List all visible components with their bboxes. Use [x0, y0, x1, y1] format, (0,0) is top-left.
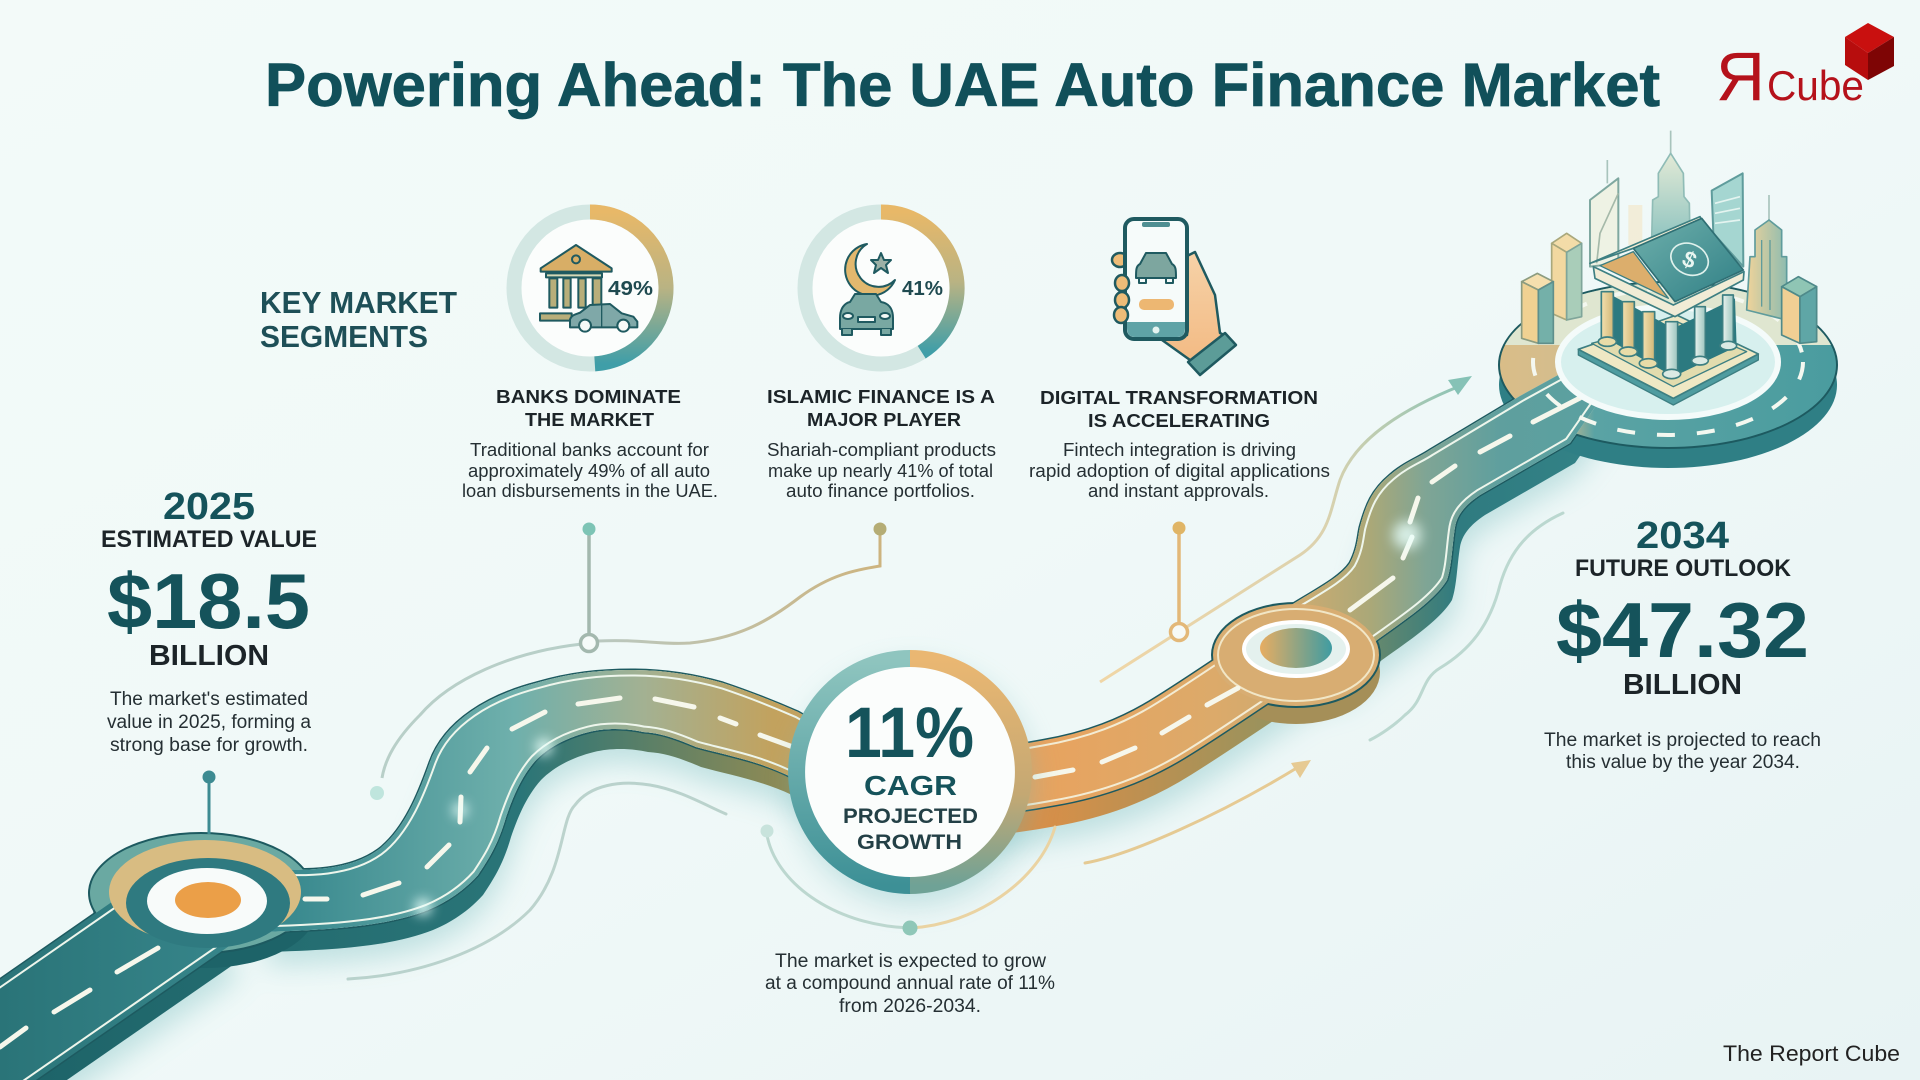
- logo: RCube: Cube: [1767, 62, 1864, 109]
- pin: 2025 marker: [202, 770, 216, 834]
- footer credit: The Report Cube: [1723, 1041, 1900, 1066]
- block: 2034 future outlook: this value by the year 2034.: [1566, 752, 1800, 773]
- segment text: digital transformation: [1029, 387, 1330, 501]
- illustration: city skyline and bank: [1522, 131, 1817, 405]
- text: CAGR description: [765, 951, 1055, 1017]
- destination plate: ring road and glow disc: [1533, 289, 1803, 435]
- block: 2025 estimated value: The market's estimated: [110, 689, 308, 710]
- block: 2025 estimated value: 2025: [163, 486, 255, 528]
- segment text: banks: loan disbursements in the UAE.: [462, 480, 718, 501]
- block: 2025 estimated value: BILLION: [149, 640, 269, 672]
- segment text: islamic finance: auto finance portfolios.: [786, 480, 975, 501]
- segment text: banks: THE MARKET: [525, 409, 655, 430]
- segment text: banks: BANKS DOMINATE: [496, 386, 681, 407]
- ring chart: banks 49%: 49%: [608, 278, 653, 300]
- block: 2025 estimated value: ESTIMATED VALUE: [101, 526, 317, 553]
- road: plates: [90, 283, 1836, 952]
- columns: [1598, 292, 1737, 379]
- block: 2025 estimated value: $18.5: [107, 557, 310, 645]
- dollar emblem: [1666, 237, 1714, 281]
- mid node: milestone: [1213, 604, 1379, 706]
- ring chart: islamic finance 41%: [805, 212, 957, 364]
- text: CAGR description: from 2026-2034.: [839, 996, 981, 1017]
- segment text: banks: Traditional banks account for: [470, 439, 709, 460]
- block: 2034 future outlook: BILLION: [1623, 669, 1742, 701]
- growth circle: 11% CAGR: [793, 658, 1033, 905]
- icon: car on phone: [1136, 253, 1176, 278]
- segment text: islamic finance: ISLAMIC FINANCE IS A: [767, 386, 995, 407]
- marker: orange dot: [175, 882, 241, 918]
- arc under growth circle: [760, 824, 1055, 936]
- heading: key market segments: SEGMENTS: [260, 319, 428, 354]
- text: CAGR description: at a compound annual rate of 11%: [765, 973, 1055, 994]
- segment text: banks: [462, 386, 718, 501]
- ring chart: banks 49%: [514, 212, 666, 364]
- heading: key market segments: [260, 285, 457, 354]
- segment text: islamic finance: Shariah-compliant products: [767, 439, 996, 460]
- block: 2034 future outlook: The market is projected to reach: [1544, 730, 1821, 751]
- growth circle: 11% CAGR: GROWTH: [857, 830, 962, 854]
- dollar emblem: $: [1678, 245, 1701, 274]
- ring chart: islamic finance 41%: 41%: [902, 278, 943, 300]
- block: 2034 future outlook: [1544, 515, 1821, 773]
- segment text: digital transformation: IS ACCELERATING: [1088, 410, 1270, 431]
- road: surface: [0, 352, 1600, 1063]
- segment text: digital transformation: and instant approvals.: [1088, 480, 1269, 501]
- block: 2034 future outlook: FUTURE OUTLOOK: [1575, 555, 1792, 582]
- road: shadow: [0, 386, 1606, 1080]
- logo: RCube: Я: [1716, 38, 1765, 115]
- segment text: digital transformation: Fintech integration is driving: [1063, 439, 1296, 460]
- block: 2034 future outlook: 2034: [1636, 515, 1729, 557]
- road: lane dashes: [0, 398, 1580, 1047]
- segment text: islamic finance: [767, 386, 996, 501]
- bank steps: [1578, 349, 1758, 405]
- heading: key market segments: KEY MARKET: [260, 285, 457, 320]
- icon: phone in hand: [1112, 219, 1236, 375]
- decorative connector curves around the road: [348, 513, 1563, 979]
- segment text: islamic finance: MAJOR PLAYER: [807, 409, 961, 430]
- icon: crescent, star and car: [840, 244, 895, 335]
- arrow: lower gold growth arrow: [1291, 760, 1311, 778]
- segment text: islamic finance: make up nearly 41% of total: [768, 460, 993, 481]
- growth circle: 11% CAGR: CAGR: [864, 770, 957, 801]
- road: light glows: [415, 521, 1421, 915]
- start node: 2025: [109, 840, 301, 948]
- title: Powering Ahead: The UAE Auto Finance Market: [265, 51, 1660, 119]
- block: 2034 future outlook: $47.32: [1556, 586, 1809, 674]
- block: 2025 estimated value: strong base for growth.: [110, 735, 308, 756]
- segment text: digital transformation: DIGITAL TRANSFORMATION: [1040, 387, 1318, 408]
- segment text: digital transformation: rapid adoption of digital applications: [1029, 460, 1330, 481]
- icon: bank and car: [540, 245, 637, 332]
- growth circle: 11% CAGR: PROJECTED: [843, 804, 978, 828]
- arrow: upper connector with milestone: [1100, 376, 1472, 682]
- segment text: banks: approximately 49% of all auto: [468, 460, 710, 481]
- skyscraper spires: [1607, 131, 1769, 220]
- roof: [1593, 267, 1744, 317]
- block: 2025 estimated value: [101, 486, 317, 756]
- growth circle: 11% CAGR: 11%: [845, 694, 974, 773]
- block: 2025 estimated value: value in 2025, forming a: [107, 712, 311, 733]
- logo: RCube: [1716, 23, 1894, 115]
- text: CAGR description: The market is expected to grow: [775, 951, 1046, 972]
- road: dark outline: [0, 281, 1838, 1063]
- road: side thickness: [0, 302, 1837, 1079]
- connector: banks and islamic finance pins: [370, 522, 886, 800]
